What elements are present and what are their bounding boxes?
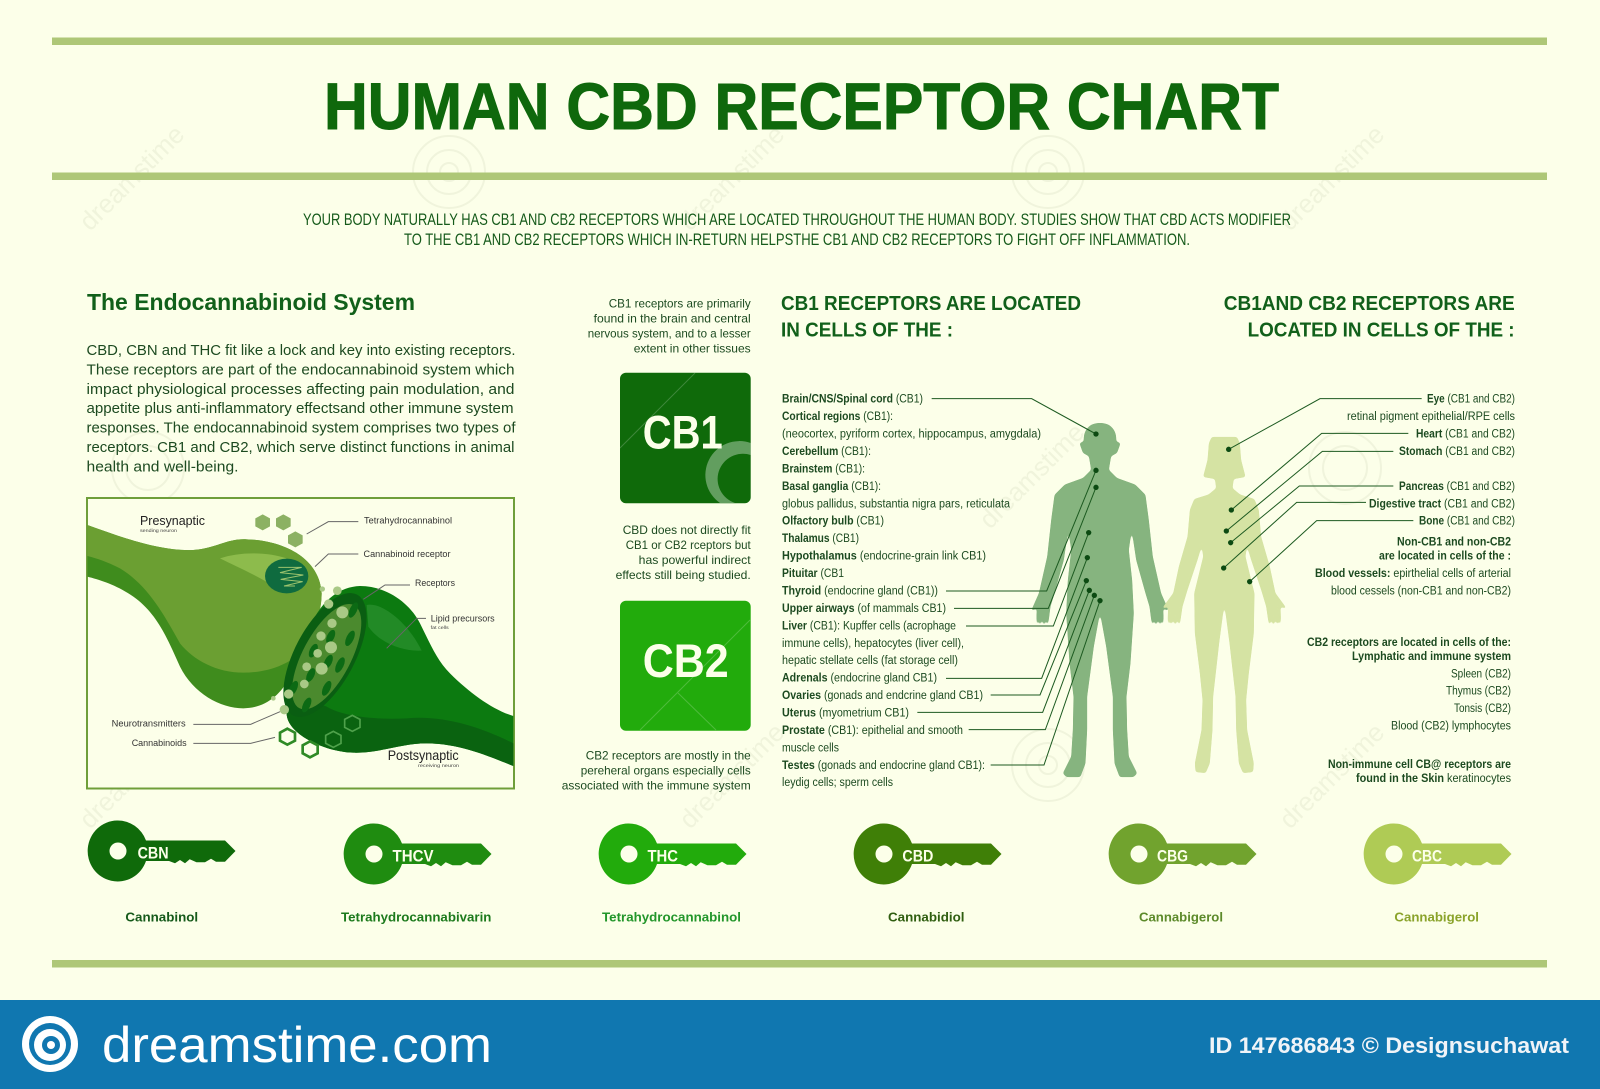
brand text: dreamstime.com [102,1017,492,1073]
intro text: TO THE CB1 AND CB2 RECEPTORS WHICH IN-RETURN HELPSTHE CB1 AND CB2 RECEPTORS TO FIGHT OFF INFLAMMATION. [404,230,1190,249]
text block: non-CB1 and non-CB2: are located in cells of the : [1379,551,1511,563]
title: HUMAN CBD RECEPTOR CHART [324,69,1279,143]
label: Cannabinol: Cannabinol [125,910,198,925]
text block: CB1 location list: immune cells), hepatocytes (liver cell), [782,638,964,650]
key: CBD [854,823,1002,884]
text block: endocannabinoid description: appetite plus anti-inflammatory effectsand other immune system [86,400,514,417]
diagram leader lines [193,522,426,743]
diagram labels: Lipid precursors [431,614,495,624]
text block: CBD note: effects still being studied. [616,568,751,582]
text block: CB1 note: nervous system, and to a lesser [588,326,751,340]
text block: CB1 location list: Brain/CNS/Spinal cord (CB1) [782,394,923,406]
label: Cannabidiol: Cannabidiol [888,910,964,925]
key: CBC [1364,823,1512,884]
CB1 box: CB1 [643,405,723,458]
text: dreamstime [673,119,790,236]
heading: CB1 and CB2 receptors: LOCATED IN CELLS OF THE : [1248,320,1515,342]
key: CBC: CBC [1412,846,1442,865]
text block: CB1 location list: hepatic stellate cells (fat storage cell) [782,655,958,667]
text block: CB1 location list: Olfactory bulb (CB1) [782,516,884,528]
text block: non-immune cell: Non-immune cell CB@ receptors are [1328,759,1511,771]
text: dreamstime [673,717,790,834]
panel: synapse diagram [87,498,514,788]
label: Tetrahydrocannabinol: Tetrahydrocannabinol [602,910,741,925]
text block: CBD note [616,523,751,582]
text block: CB1 and CB2 location list [1347,394,1515,528]
text block: CB2 receptors: Blood (CB2) lymphocytes [1391,720,1511,732]
key: THC [599,823,746,884]
text block: non-CB1 and non-CB2: blood cessels (non-CB1 and non-CB2) [1331,585,1511,597]
heading: CB1 and CB2 receptors [1224,293,1515,342]
text block: CB2 note: associated with the immune system [562,779,751,793]
text block: CBD note: has powerful indirect [639,553,751,567]
diagram labels: Cannabinoids [132,738,187,748]
text block: CB2 note [562,749,751,793]
diagram labels: Receptors [415,578,455,588]
text: dreamstime [973,417,1090,534]
text block: endocannabinoid description: health and well-being. [86,458,239,475]
text block: CB1 note: found in the brain and central [594,312,751,326]
heading: CB1 receptors: IN CELLS OF THE : [781,320,953,342]
female body figure [1163,437,1286,773]
text block: endocannabinoid description: These receptors are part of the endocannabinoid system which [86,361,514,378]
text block: CB1 location list: Hypothalamus (endocrine-grain link CB1) [782,551,986,563]
text block: endocannabinoid description: receptors. CB1 and CB2, which serve distinct functions in animal [86,439,514,456]
key: THCV: THCV [392,846,434,865]
text block: non-immune cell: found in the Skin keratinocytes [1356,773,1511,785]
text block: CB1 and CB2 location list: Stomach (CB1 and CB2) [1399,446,1515,458]
text block: CB2 receptors: Thymus (CB2) [1446,686,1511,698]
heading: CB1 receptors: CB1 RECEPTORS ARE LOCATED [781,293,1081,315]
text block: CB2 receptors: Lymphatic and immune system [1352,651,1511,663]
diagram labels: Presynaptic [140,513,205,528]
text block: CB2 receptors: Tonsis (CB2) [1454,703,1511,715]
text block: endocannabinoid description: impact physiological processes affecting pain modulation, and [86,381,514,398]
CB1 box [620,373,751,503]
label: Cannabigerol (CBC): Cannabigerol [1394,910,1479,925]
text: dreamstime [1273,717,1390,834]
text block: non-immune cell [1328,759,1511,785]
text block: CB1 location list: Thyroid (endocrine gland (CB1)) [782,586,938,598]
text block: CB2 note: CB2 receptors are mostly in the [586,749,751,763]
text block: CB1 location list: Pituitar (CB1 [782,568,844,580]
text block: CB1 location list: Upper airways (of mammals CB1) [782,603,946,615]
diagram labels: Cannabinoid receptor [364,549,450,559]
text block: CB1 and CB2 location list: Pancreas (CB1 and CB2) [1399,481,1515,493]
diagram labels [112,513,495,768]
text block: non-CB1 and non-CB2 [1315,537,1511,597]
text block: non-CB1 and non-CB2: Non-CB1 and non-CB2 [1397,537,1511,549]
diagram labels: Postsynaptic [388,747,459,763]
text block: CB1 location list: Ovaries (gonads and endcrine gland CB1) [782,690,983,702]
heading: endocannabinoid system: The Endocannabinoid System [87,289,415,315]
label: Cannabigerol (CBG): Cannabigerol [1139,910,1223,925]
key: CBG: CBG [1157,846,1188,865]
key: CBG [1109,823,1256,884]
diagram labels: Neurotransmitters [112,719,186,729]
intro text [303,210,1291,249]
text block: CB1 note: extent in other tissues [634,342,751,356]
text block: CB1 note [588,297,751,356]
text block: CB2 note: pereheral organs especially cells [581,764,751,778]
text block: CB1 location list: Adrenals (endocrine gland CB1) [782,673,937,685]
CB2 box: CB2 [643,634,729,687]
text block: CB1 location list: Prostate (CB1): epithelial and smooth [782,725,963,737]
icon: spiral logo [22,1016,78,1072]
text block: CB1 and CB2 location list: retinal pigment epithelial/RPE cells [1347,411,1515,423]
text block: CB1 location list: (neocortex, pyriform cortex, hippocampus, amygdala) [782,429,1041,441]
text block: endocannabinoid description [86,342,516,475]
text block: CB1 location list: Testes (gonads and endocrine gland CB1): [782,760,985,772]
text block: CB1 location list [782,394,1041,789]
text block: CB1 and CB2 location list: Digestive tract (CB1 and CB2) [1369,498,1515,510]
text: dreamstime [73,717,190,834]
text block: CB2 receptors: Spleen (CB2) [1451,668,1511,680]
text block: CB1 location list: Basal ganglia (CB1): [782,481,881,493]
postsynaptic neuron [266,581,513,766]
male body figure [1032,423,1168,777]
text block: CB1 and CB2 location list: Heart (CB1 and CB2) [1416,429,1515,441]
text block: CBD note: CB1 or CB2 rceptors but [626,538,751,552]
leader lines and dots: CB1 and CB2 [1221,399,1422,584]
text: dreamstime [73,119,190,236]
text block: CB1 and CB2 location list: Bone (CB1 and CB2) [1419,516,1515,528]
text block: CB1 location list: Brainstem (CB1): [782,463,865,475]
text block: CB2 receptors: CB2 receptors are located in cells of the: [1307,637,1511,649]
text block: CB1 note: CB1 receptors are primarily [609,297,751,311]
text block: CB1 and CB2 location list: Eye (CB1 and CB2) [1427,394,1515,406]
diagram labels: fat cells [431,625,450,630]
diagram labels: sending neuron [140,528,178,533]
heading: CB1 receptors [781,293,1081,342]
intro text: YOUR BODY NATURALLY HAS CB1 AND CB2 RECEPTORS WHICH ARE LOCATED THROUGHOUT THE HUMAN BODY. STUDIES SHOW THAT CBD ACTS MODIFIER [303,210,1291,229]
cannabinoid hexagons [255,514,360,757]
key: THCV [344,823,492,884]
text block: CB1 location list: Uterus (myometrium CB1) [782,708,909,720]
text block: endocannabinoid description: CBD, CBN and THC fit like a lock and key into existing receptors. [86,342,516,359]
text block: CB1 location list: Cerebellum (CB1): [782,446,871,458]
diagram labels: receiving neuron [418,763,460,768]
CB2 box [620,601,751,731]
text block: CB1 location list: Thalamus (CB1) [782,533,859,545]
presynaptic neuron [87,525,322,708]
diagram labels: Tetrahydrocannabinol [364,516,452,526]
text block: CB1 location list: globus pallidus, substantia nigra pars, reticulata [782,498,1011,510]
text block: CB1 location list: Cortical regions (CB1): [782,411,893,423]
text block: CB2 receptors [1307,637,1511,732]
text block: CB1 location list: muscle cells [782,742,839,754]
footer bar [0,1000,1600,1089]
text block: CB1 location list: Liver (CB1): Kupffer cells (acrophage [782,620,956,632]
leader lines and dots: CB1 [917,399,1103,765]
heading: CB1 and CB2 receptors: CB1AND CB2 RECEPTORS ARE [1224,293,1515,315]
key: CBN [88,820,236,881]
text block: non-CB1 and non-CB2: Blood vessels: epirthelial cells of arterial [1315,568,1511,580]
text: dreamstime [1273,119,1390,236]
image id text: ID 147686843 © Designsuchawat [1209,1033,1570,1058]
key: THC: THC [648,846,678,865]
key: CBN: CBN [138,843,169,862]
text block: CB1 location list: leydig cells; sperm cells [782,777,893,789]
text block: CBD note: CBD does not directly fit [623,523,751,537]
key: CBD: CBD [902,846,933,865]
label: Tetrahydrocannabivarin: Tetrahydrocannabivarin [341,910,491,925]
text block: endocannabinoid description: responses. The endocannabinoid system comprises two types of [86,420,516,437]
